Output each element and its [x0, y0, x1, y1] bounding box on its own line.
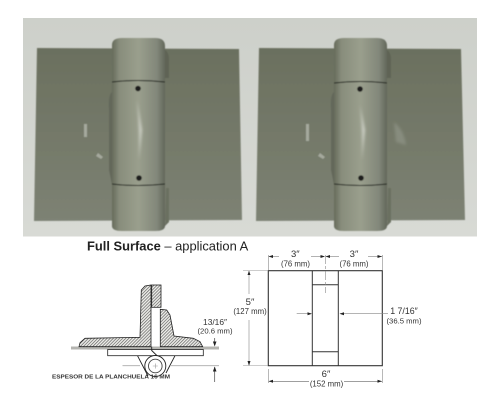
- screws: [135, 86, 141, 91]
- base plate: [108, 350, 203, 356]
- dimension label: 13/16″: [203, 317, 227, 327]
- plate glare: [84, 124, 103, 159]
- plate glare: [306, 124, 325, 159]
- seams: [112, 80, 165, 186]
- top dimensions: [268, 249, 382, 270]
- photo background: [23, 18, 477, 236]
- highlight: [137, 100, 142, 160]
- top dimensions: (76 mm): [339, 259, 369, 268]
- bottom dimension: 6″: [322, 369, 331, 380]
- top dimensions: (76 mm): [281, 259, 310, 268]
- height dimension: 5″: [246, 297, 255, 308]
- photo: right hinge: [256, 38, 465, 231]
- barrel outline: [312, 271, 338, 366]
- hinge plate: [256, 48, 465, 221]
- top block section: [152, 285, 161, 307]
- dimension label metric: (20.6 mm): [197, 326, 233, 336]
- seams: [334, 82, 387, 186]
- height dimension: [233, 271, 268, 366]
- barrel: [334, 38, 387, 231]
- right leaf section: [160, 309, 203, 347]
- screws: [357, 86, 363, 92]
- surface line: [71, 346, 219, 350]
- bottom dimension: (152 mm): [310, 379, 344, 388]
- knuckle: [138, 347, 175, 376]
- bottom dimension: [268, 369, 382, 388]
- top dimensions: 3″: [291, 249, 300, 260]
- width dimension: 1 7/16″: [390, 306, 418, 316]
- outer outline: [268, 271, 382, 366]
- plan drawing: [233, 249, 422, 388]
- photo: left hinge: [34, 38, 242, 231]
- width dimension: (36.5 mm): [386, 316, 422, 326]
- hinge plate: [34, 48, 242, 221]
- height dimension: (127 mm): [233, 307, 267, 316]
- width dimension: [297, 306, 422, 326]
- barrel: [112, 38, 165, 231]
- section drawing: [52, 285, 233, 382]
- left leaf section: [79, 285, 151, 347]
- top dimensions: 3″: [350, 249, 359, 260]
- highlight: [360, 105, 365, 160]
- caption: Full Surface – application A: [87, 238, 249, 254]
- center line: [324, 255, 326, 293]
- dimension lines: [122, 365, 219, 367]
- thickness note: ESPESOR DE LA PLANCHUELA 16 MM: [52, 374, 171, 380]
